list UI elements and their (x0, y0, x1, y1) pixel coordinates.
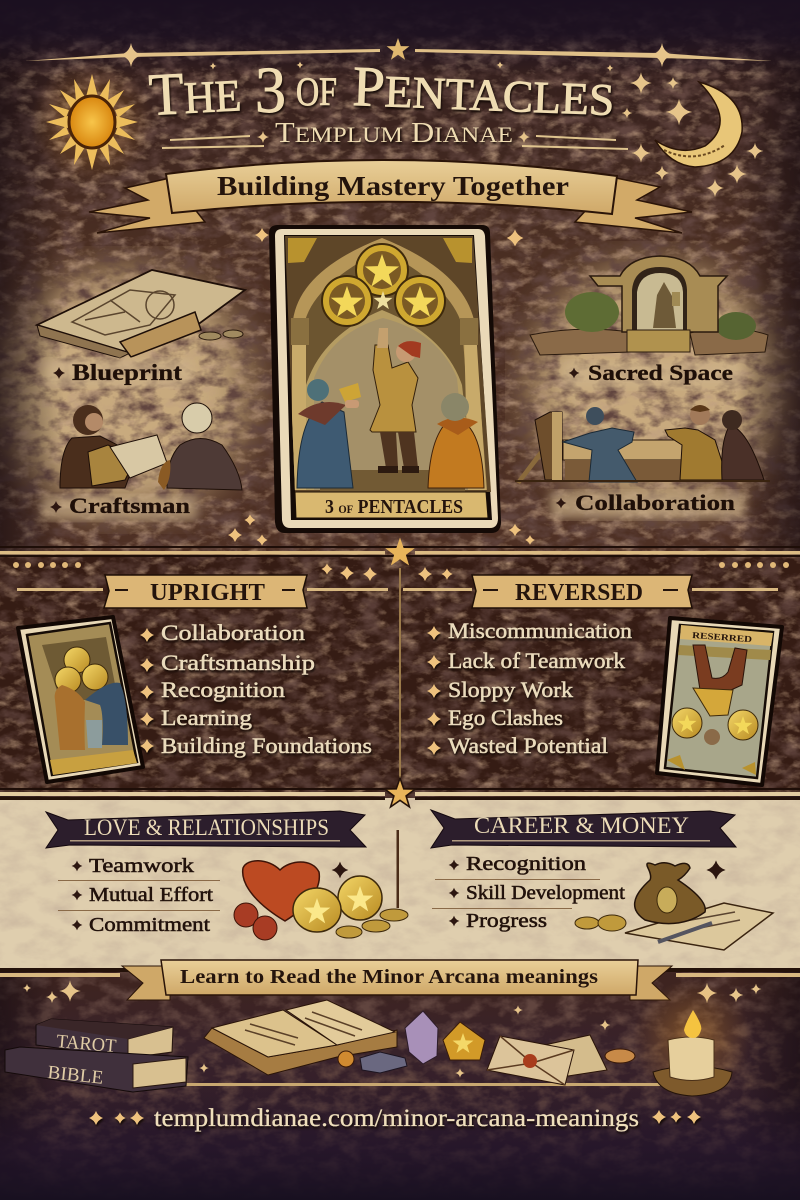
love keyword list: Commitment (89, 914, 211, 936)
career keyword list: Recognition (466, 853, 586, 875)
banner: Building Mastery Together: Building Mastery Together (217, 171, 569, 201)
reversed keyword list: Sloppy Work (448, 677, 573, 702)
title (147, 54, 616, 128)
title: OF (296, 69, 337, 114)
banner: love and relationships: LOVE & RELATIONSHIPS (84, 815, 329, 840)
label: Craftsman: Craftsman (69, 493, 190, 518)
love keyword list (58, 855, 220, 936)
banner: upright (17, 575, 388, 608)
career keyword list: Skill Development (466, 882, 625, 904)
banner: Building Mastery Together (89, 160, 692, 233)
love keyword list: Teamwork (89, 855, 194, 877)
reversed keyword list: Ego Clashes (448, 705, 563, 730)
card illustration (280, 234, 500, 494)
career keyword list: Progress (466, 910, 547, 932)
reversed card (657, 618, 782, 785)
panel: upright (17, 575, 388, 782)
icon: open book (204, 1000, 397, 1075)
banner: career and money: CAREER & MONEY (474, 813, 689, 838)
ribbon tails (89, 178, 205, 233)
panel: central tarot card (269, 225, 501, 533)
banner: reversed: REVERSED (515, 580, 643, 606)
subtitle: Templum Dianae: TEMPLUM DIANAE (275, 118, 513, 149)
illustration: collaborating builders (515, 405, 770, 484)
illustration: craftsmen at work (60, 403, 242, 490)
figure: monk in blue robe (297, 402, 353, 488)
reversed keyword list: Lack of Teamwork (448, 648, 625, 673)
title: 3 (255, 54, 286, 127)
icon: crystals (360, 1011, 485, 1073)
banner: upright: UPRIGHT (150, 580, 265, 606)
icon: heart with coins and roses (234, 830, 408, 940)
label: Sacred Space (562, 360, 742, 388)
title: THE (147, 57, 243, 128)
career keyword list (432, 853, 625, 932)
icon: sun (30, 60, 154, 184)
upright keyword list: Recognition (161, 677, 285, 702)
icon: tarot and bible books (5, 1019, 188, 1092)
reversed keyword list: Wasted Potential (448, 733, 608, 758)
reversed card: RESERRED (692, 630, 753, 644)
reversed keyword list: Miscommunication (448, 618, 632, 643)
upright keyword list: Learning (161, 705, 252, 730)
icon: crescent moon and stars (622, 72, 763, 197)
label: Craftsman (42, 493, 197, 520)
label: Sacred Space: Sacred Space (588, 360, 733, 385)
shelf line (165, 1083, 660, 1086)
panel: career and money (431, 810, 773, 950)
figure: mason (370, 345, 418, 432)
card name plate: 3 OF PENTACLES (325, 496, 463, 518)
banner: learn to read the minor arcana: Learn to Read the Minor Arcana meanings (180, 966, 598, 988)
panel: reversed (403, 575, 782, 785)
upright keyword list: Building Foundations (161, 733, 372, 758)
reversed keyword list (427, 618, 632, 758)
love keyword list: Mutual Effort (89, 884, 213, 906)
footer sparkles (23, 980, 761, 1078)
top ornament rule (25, 38, 772, 72)
upright keyword list: Craftsmanship (161, 650, 315, 675)
label: Blueprint (46, 360, 191, 386)
banner: career and money (431, 810, 736, 848)
icon: money bag and contract (575, 860, 773, 950)
sparkle clusters by the card (228, 228, 535, 546)
illustration: sacred space archway (530, 256, 768, 355)
banner: reversed (403, 575, 778, 608)
icon: lit candle (632, 980, 752, 1100)
upright keyword list: Collaboration (161, 620, 305, 645)
label: Collaboration (550, 490, 745, 518)
label: Blueprint: Blueprint (72, 360, 182, 385)
panel: lower dark section (0, 538, 800, 794)
illustration: blueprint scroll (37, 270, 245, 358)
upright card (18, 617, 143, 782)
panel: parchment readings band (0, 778, 800, 968)
figure: orange robed noble (428, 418, 484, 488)
card name plate (295, 492, 488, 518)
banner: love and relationships (46, 811, 366, 848)
icon: tarot and bible books: BIBLE (46, 1062, 104, 1089)
panel: love and relationships (46, 811, 408, 940)
icon: sealed envelope and letter (487, 1035, 635, 1085)
banner: learn to read the minor arcana (0, 960, 800, 1000)
subtitle: Templum Dianae (162, 118, 628, 150)
upright keyword list (140, 620, 372, 758)
icon: tarot and bible books: TAROT (56, 1031, 118, 1057)
label: Collaboration: Collaboration (575, 490, 735, 515)
website url: templumdianae.com/minor-arcana-meanings (154, 1105, 639, 1132)
title: PENTACLES (352, 55, 616, 128)
